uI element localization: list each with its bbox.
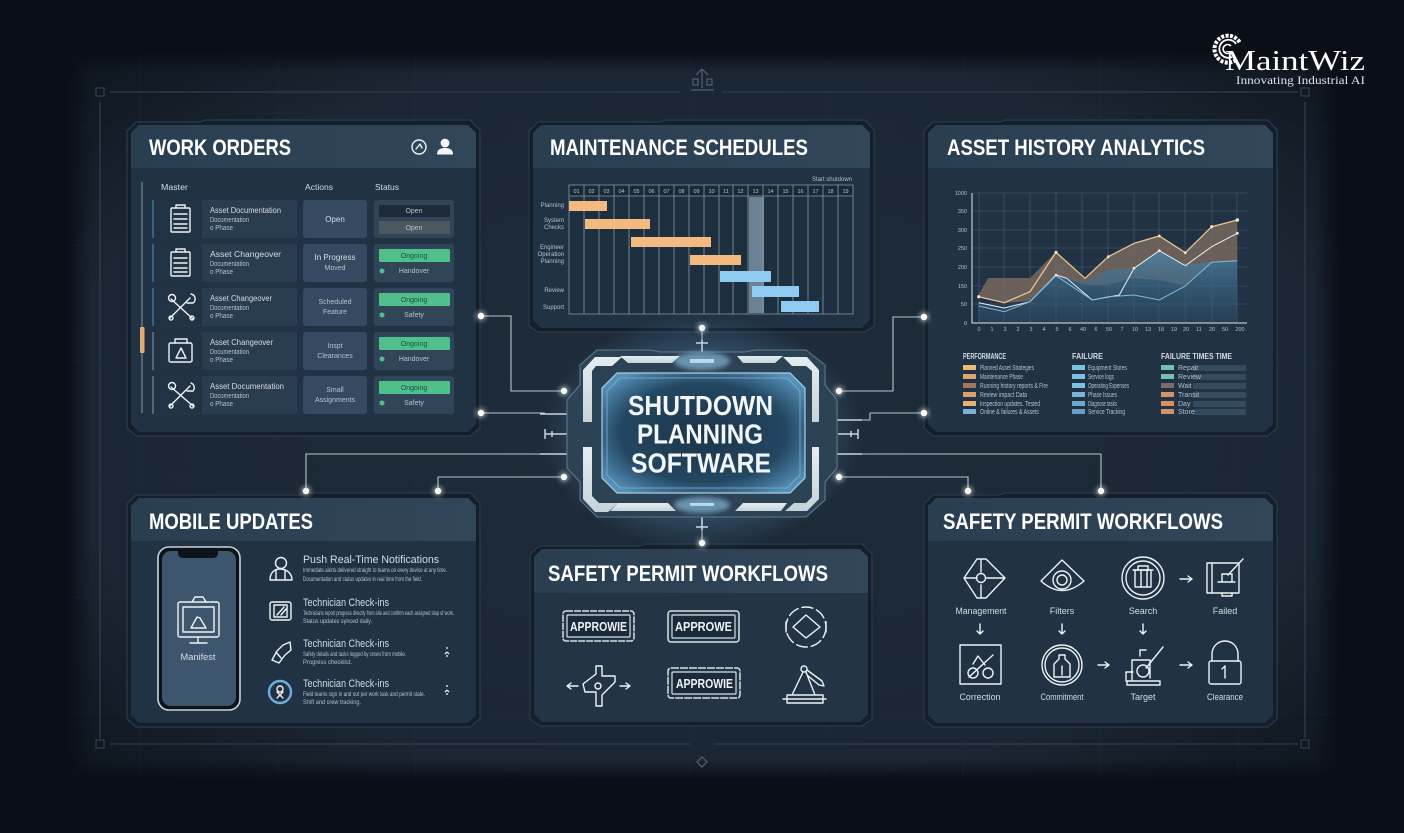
arrow bbox=[1180, 662, 1192, 668]
legend: failure: Service logs bbox=[1088, 374, 1114, 381]
orange series bbox=[979, 220, 1237, 303]
item: technician check-ins 1 bbox=[270, 597, 454, 625]
logo bbox=[1214, 36, 1365, 87]
gantt column labels: 09 bbox=[693, 189, 700, 195]
row 3: Ongoing bbox=[401, 297, 427, 304]
column headers bbox=[161, 183, 399, 192]
gantt column labels: 02 bbox=[588, 189, 595, 195]
phone bbox=[158, 547, 240, 710]
row 4: Inspt bbox=[327, 343, 343, 350]
heading: MOBILE UPDATES bbox=[149, 509, 313, 534]
x axis labels: 3 bbox=[1003, 327, 1007, 333]
timeline rail bbox=[140, 182, 144, 413]
item: technician check-ins 2: Safety details and tasks logged by crews from mobile. bbox=[303, 652, 406, 658]
legend: failure times: Review bbox=[1178, 374, 1202, 381]
step: clearance: Clearance bbox=[1207, 692, 1243, 702]
gantt column labels: 08 bbox=[678, 189, 685, 195]
row 4 bbox=[153, 332, 454, 370]
x axis labels: 11 bbox=[1196, 327, 1202, 333]
row 2: Documentation bbox=[210, 261, 249, 268]
legend: failure: Phase Issues bbox=[1088, 392, 1117, 399]
gantt row labels: Support bbox=[543, 305, 564, 311]
row 1: Documentation bbox=[210, 217, 249, 224]
y axis labels: 350 bbox=[958, 209, 967, 215]
legend: performance: Maintenance Phase bbox=[980, 374, 1023, 381]
y axis labels: 1000 bbox=[955, 191, 967, 197]
tagline: Innovating Industrial AI bbox=[1236, 73, 1365, 87]
gantt column labels: 13 bbox=[752, 189, 759, 195]
gantt column labels: 03 bbox=[603, 189, 610, 195]
gantt row labels: Review bbox=[544, 288, 565, 294]
legend: failure times: Transit bbox=[1178, 392, 1199, 399]
item: technician check-ins 1: Technician Check-ins bbox=[303, 597, 389, 609]
row 5: Asset Documentation bbox=[210, 382, 284, 391]
x axis labels: 7 bbox=[1120, 327, 1124, 333]
row 5: Assignments bbox=[315, 397, 356, 404]
icon: top frame marker bbox=[691, 69, 714, 90]
panel: asset history analytics bbox=[924, 120, 1277, 436]
row 2: Ongoing bbox=[401, 253, 427, 260]
item: technician check-ins 2: Technician Check-ins bbox=[303, 638, 389, 650]
y axis labels: 50 bbox=[961, 302, 967, 308]
icon: tool station bbox=[1126, 647, 1163, 685]
row 1: Asset Documentation bbox=[210, 206, 281, 215]
column headers: Actions bbox=[305, 183, 333, 192]
x axis labels: 6 bbox=[1094, 327, 1098, 333]
row 5: Documentation bbox=[210, 393, 249, 400]
item: real-time notifications: Push Real-Time Notifications bbox=[303, 554, 439, 566]
icon: alert monitor bbox=[178, 597, 219, 643]
gantt row labels: System bbox=[544, 218, 564, 224]
heading: WORK ORDERS bbox=[149, 135, 291, 160]
x axis labels: 4 bbox=[1042, 327, 1046, 333]
icon: circled bottle bbox=[1042, 645, 1082, 685]
blue area bbox=[978, 250, 1237, 323]
gantt column labels: 19 bbox=[842, 189, 849, 195]
item: technician check-ins 3 bbox=[269, 678, 449, 706]
hub title bbox=[628, 390, 773, 478]
hub title: SHUTDOWN bbox=[628, 390, 773, 421]
x axis labels: 18 bbox=[1158, 327, 1164, 333]
legend: performance: Planned Asset Strategies bbox=[980, 365, 1034, 372]
gantt row labels: Operation bbox=[538, 252, 564, 258]
row 2 bbox=[153, 244, 454, 282]
legend: performance: Online & failures & Assets bbox=[980, 409, 1039, 416]
icon: technician bbox=[270, 558, 292, 580]
gantt column labels: 15 bbox=[782, 189, 789, 195]
x axis labels: 5 bbox=[1055, 327, 1059, 333]
stamp: approve 3: APPROWIE bbox=[676, 676, 733, 691]
brown area bbox=[978, 220, 1237, 303]
step: search bbox=[1122, 557, 1164, 616]
row 5: Ongoing bbox=[401, 385, 427, 392]
row 4: o Phase bbox=[210, 357, 233, 364]
icon: pipe arrows bbox=[567, 666, 630, 706]
stamp: approve 3 bbox=[668, 668, 740, 698]
stamp: approve 1: APPROWIE bbox=[570, 619, 627, 634]
y axis labels: 300 bbox=[958, 228, 967, 234]
white series bbox=[979, 233, 1237, 308]
legend: failure: Service Tracking bbox=[1088, 409, 1125, 416]
icon: crossed tools bbox=[168, 382, 194, 408]
item: technician check-ins 1: Technicians report progress directly from site and confirm each assigned step of work. bbox=[303, 611, 454, 617]
icon: octagon fan bbox=[964, 559, 1005, 598]
y axis labels: 150 bbox=[958, 284, 967, 290]
step: commitment: Commitment bbox=[1040, 692, 1084, 702]
gantt column labels: 05 bbox=[633, 189, 640, 195]
icon: bottom frame marker bbox=[697, 757, 707, 767]
legend: failure times: FAILURE TIMES TIME bbox=[1161, 352, 1233, 361]
legend: performance: Inspection updates. Tested bbox=[980, 401, 1040, 408]
row 5: Small bbox=[326, 387, 344, 394]
x axis labels: 40 bbox=[1080, 327, 1086, 333]
arrow bbox=[1180, 576, 1192, 582]
x axis labels: 1 bbox=[990, 327, 994, 333]
icon: circled gate bbox=[1122, 557, 1164, 599]
icon: tablet bbox=[270, 602, 291, 620]
outer frame bbox=[96, 88, 1309, 748]
x axis labels: 20 bbox=[1183, 327, 1189, 333]
item: technician check-ins 3: Technician Check-ins bbox=[303, 678, 389, 690]
row 1: Open bbox=[405, 225, 423, 232]
panel: work orders bbox=[127, 120, 480, 436]
row 5: o Phase bbox=[210, 401, 233, 408]
gantt column labels bbox=[573, 189, 849, 195]
legend: failure: Equipment Stores bbox=[1088, 365, 1127, 372]
icon: kebab menu bbox=[445, 685, 449, 695]
y axis labels: 0 bbox=[964, 321, 967, 327]
gantt row labels bbox=[538, 177, 852, 311]
gantt column labels: 10 bbox=[708, 189, 715, 195]
row 2: Moved bbox=[324, 265, 346, 272]
heading: MAINTENANCE SCHEDULES bbox=[550, 135, 808, 160]
step: management bbox=[956, 559, 1007, 616]
gantt column labels: 07 bbox=[663, 189, 670, 195]
gantt column labels: 11 bbox=[723, 189, 729, 195]
gantt bars bbox=[569, 201, 741, 265]
arrows down bbox=[977, 624, 1146, 634]
legend: failure times: Store bbox=[1178, 409, 1195, 416]
row 4: Ongoing bbox=[401, 341, 427, 348]
legend: performance: Running history reports & Fire bbox=[980, 383, 1048, 390]
legend: failure: FAILURE bbox=[1072, 352, 1104, 361]
row 1: Open bbox=[325, 215, 345, 224]
step: clearance bbox=[1207, 641, 1243, 702]
x axis labels: 20 bbox=[1209, 327, 1215, 333]
data points bbox=[977, 218, 1239, 298]
row 2: Asset Changeover bbox=[210, 250, 281, 259]
panel: mobile updates bbox=[127, 493, 480, 727]
step: target: Target bbox=[1130, 692, 1156, 702]
icon: drawing board bbox=[1207, 559, 1243, 596]
step: correction bbox=[960, 645, 1001, 702]
gantt column labels: 18 bbox=[827, 189, 834, 195]
item: technician check-ins 2 bbox=[272, 638, 449, 666]
x axis labels: 6 bbox=[1068, 327, 1072, 333]
row 3: Safety bbox=[404, 312, 424, 319]
panel: safety permit workflows center bbox=[530, 544, 872, 726]
icon: kebab menu bbox=[445, 647, 449, 657]
legend: failure times: Day bbox=[1178, 401, 1191, 408]
gantt column labels: 04 bbox=[618, 189, 625, 195]
row 2: o Phase bbox=[210, 269, 233, 276]
hub top and bottom flare bbox=[674, 352, 730, 513]
hub screen bbox=[602, 373, 805, 493]
gantt row labels: Checks bbox=[544, 225, 564, 231]
blue series bbox=[979, 261, 1237, 312]
icon: gear bbox=[1214, 36, 1240, 63]
row 3: o Phase bbox=[210, 313, 233, 320]
axes bbox=[972, 193, 1247, 323]
brand name: MaintWiz bbox=[1225, 46, 1365, 77]
icon: crossed tools bbox=[168, 294, 195, 320]
x axis labels: 3 bbox=[1029, 327, 1033, 333]
row 4: Clearances bbox=[317, 353, 353, 360]
icon: tools box bbox=[960, 645, 1001, 684]
legend: failure bbox=[1072, 352, 1129, 416]
gantt chart bbox=[538, 177, 853, 314]
heading: ASSET HISTORY ANALYTICS bbox=[947, 135, 1205, 160]
step: correction: Correction bbox=[960, 692, 1000, 702]
row 3: Feature bbox=[323, 309, 347, 316]
item: real-time notifications: Documentation and status updates in real time from the field. bbox=[303, 577, 422, 583]
step: target bbox=[1126, 647, 1163, 702]
hub outer plate bbox=[567, 350, 837, 517]
gantt row labels: Planning bbox=[541, 259, 564, 265]
heading: SAFETY PERMIT WORKFLOWS bbox=[548, 561, 828, 586]
gantt column labels: 14 bbox=[767, 189, 774, 195]
legend: failure: Operating Expenses bbox=[1088, 383, 1129, 390]
gantt column labels: 17 bbox=[812, 189, 819, 195]
icon: hoist bbox=[783, 666, 826, 703]
step: management: Management bbox=[956, 606, 1007, 616]
hub title: PLANNING bbox=[637, 418, 763, 450]
stamp: approve 2 bbox=[668, 611, 739, 642]
row 2: Handover bbox=[399, 268, 430, 275]
hub title: SOFTWARE bbox=[631, 448, 771, 478]
legend: failure times bbox=[1161, 352, 1246, 416]
item: real-time notifications bbox=[270, 554, 447, 583]
item: technician check-ins 2: Progress checklist. bbox=[303, 660, 352, 666]
central hub: shutdown planning software bbox=[540, 315, 862, 551]
icon: valve ring bbox=[786, 607, 826, 647]
step: failed bbox=[1207, 559, 1243, 616]
icon: glove bbox=[272, 642, 291, 663]
icon: clipboard bbox=[171, 249, 190, 276]
step: commitment bbox=[1040, 645, 1084, 702]
row 2: In Progress bbox=[314, 253, 356, 262]
x axis labels: 200 bbox=[1235, 327, 1245, 333]
row 4: Asset Changeover bbox=[210, 338, 273, 347]
icon: refresh bbox=[412, 140, 426, 154]
row 4: Handover bbox=[399, 356, 430, 363]
gantt row labels: Engineer bbox=[540, 245, 564, 251]
legend: performance bbox=[963, 352, 1048, 416]
gantt column labels: 12 bbox=[737, 189, 744, 195]
gantt row labels: Start shutdown bbox=[812, 177, 852, 183]
y axis labels: 200 bbox=[958, 265, 967, 271]
gantt column labels: 01 bbox=[573, 189, 580, 195]
hub side connectors bbox=[540, 340, 862, 530]
row 1: Open bbox=[405, 208, 423, 215]
icon: diamond seal bbox=[1041, 560, 1084, 590]
y axis labels: 250 bbox=[958, 246, 967, 252]
legend: failure times: Wait bbox=[1178, 383, 1192, 390]
row 5 bbox=[153, 376, 454, 414]
row 5: Safety bbox=[404, 400, 424, 407]
stamp: approve 1 bbox=[563, 611, 634, 641]
step: search: Search bbox=[1129, 606, 1157, 616]
legend: failure times: Repair bbox=[1178, 365, 1199, 372]
panel: maintenance schedules bbox=[529, 120, 874, 332]
phone label: Manifest bbox=[180, 652, 216, 662]
x axis labels bbox=[977, 327, 1245, 333]
gantt column labels: 06 bbox=[648, 189, 655, 195]
step: filters: Filters bbox=[1050, 606, 1075, 616]
row 3: Documentation bbox=[210, 305, 249, 312]
x axis labels: 13 bbox=[1145, 327, 1151, 333]
x axis labels: 50 bbox=[1222, 327, 1228, 333]
item: real-time notifications: Immediate alerts delivered straight to teams on every device at any time. bbox=[303, 568, 447, 574]
legend: performance: PERFORMANCE bbox=[963, 352, 1006, 361]
icon: badge ring bbox=[269, 681, 291, 703]
stamp: approve 2: APPROWE bbox=[675, 619, 732, 634]
connectors bbox=[301, 311, 1106, 548]
column headers: Status bbox=[375, 183, 399, 192]
gantt row labels: Planning bbox=[541, 203, 564, 209]
item: technician check-ins 3: Shift and crew tracking. bbox=[303, 700, 361, 706]
row 3: Asset Changeover bbox=[210, 294, 272, 303]
hub white frame bbox=[583, 356, 819, 512]
gantt column labels: 16 bbox=[797, 189, 804, 195]
hub glow bbox=[542, 315, 862, 551]
row 3 bbox=[153, 288, 454, 326]
heading: SAFETY PERMIT WORKFLOWS bbox=[943, 509, 1223, 534]
line chart bbox=[955, 191, 1247, 333]
hub inner line bbox=[607, 378, 800, 488]
step: failed: Failed bbox=[1213, 606, 1237, 616]
legend: performance: Review impact Data bbox=[980, 392, 1027, 399]
step: filters bbox=[1041, 560, 1084, 616]
item: technician check-ins 1: Status updates synced daily. bbox=[303, 619, 372, 625]
icon: padlock bbox=[1209, 641, 1241, 684]
row 1: o Phase bbox=[210, 225, 233, 232]
icon: user bbox=[437, 139, 453, 154]
icon: hazard case bbox=[169, 339, 192, 362]
legend: failure: Diagnose tasks bbox=[1088, 401, 1117, 408]
x axis labels: 0 bbox=[977, 327, 981, 333]
panel: safety permit workflows right bbox=[924, 493, 1277, 727]
icon: clipboard bbox=[171, 205, 190, 232]
row 1 bbox=[153, 200, 454, 238]
y axis labels bbox=[955, 191, 967, 327]
x axis labels: 19 bbox=[1171, 327, 1177, 333]
column headers: Master bbox=[161, 183, 188, 192]
x axis labels: 10 bbox=[1132, 327, 1138, 333]
item: technician check-ins 3: Field teams sign in and out per work task and permit state. bbox=[303, 692, 425, 698]
row 4: Documentation bbox=[210, 349, 249, 356]
arrow bbox=[1098, 662, 1109, 668]
row 3: Scheduled bbox=[318, 299, 352, 306]
x axis labels: 2 bbox=[1016, 327, 1020, 333]
x axis labels: 50 bbox=[1106, 327, 1112, 333]
